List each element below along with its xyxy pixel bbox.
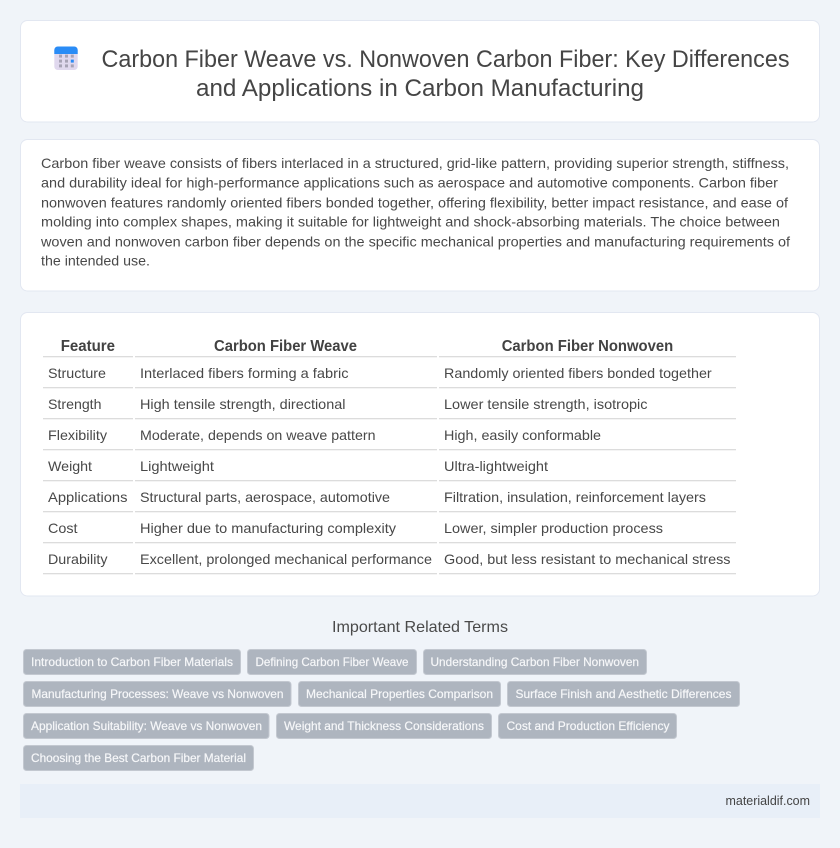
table row: structure: Interlaced fibers forming a fabric [140,365,348,381]
panel: header [20,20,820,122]
table row: strength: Strength [48,396,102,412]
text block: intro paragraph [40,155,790,268]
heading: related terms: Important Related Terms [332,619,508,636]
table row: weight: Weight [48,458,92,474]
table row: strength [43,396,736,419]
table header: Carbon Fiber Weave [214,338,357,355]
table row: flexibility: Moderate, depends on weave pattern [140,427,376,443]
table row: structure [43,365,736,388]
tag list: related terms [24,650,740,770]
title: and Applications in Carbon Manufacturing [196,75,644,102]
tag: Defining Carbon Fiber Weave [256,655,409,669]
tag: Weight and Thickness Considerations [284,719,484,733]
table row: flexibility [43,427,736,450]
table row: durability [43,551,736,574]
table row: weight: Ultra-lightweight [444,458,548,474]
icon: calendar grid [54,46,78,70]
table row: applications [43,489,736,512]
table row: applications: Structural parts, aerospace, automotive [140,489,390,505]
tag [298,682,500,706]
table header: Carbon Fiber Nonwoven [502,338,673,355]
text block: intro paragraph: molding into complex shapes, making it suitable for lightweight and shock-absorbing materials. The choice between [41,214,780,230]
text block: intro paragraph: the intended use. [41,252,150,268]
tag: Cost and Production Efficiency [506,719,670,733]
table row: cost: Lower, simpler production process [444,520,663,536]
tag: Introduction to Carbon Fiber Materials [31,655,233,669]
table row: durability: Good, but less resistant to mechanical stress [444,551,730,567]
footer: materialdif.com [726,794,810,808]
footer [20,784,820,818]
text block: intro paragraph: Carbon fiber weave consists of fibers interlaced in a structured, grid-like pattern, providing superior strength, stiffness, [41,155,789,171]
table row: structure: Structure [48,365,106,381]
tag [24,650,240,674]
tag: Surface Finish and Aesthetic Differences [516,687,732,701]
table header: Feature [61,338,115,355]
table row: cost: Cost [48,520,78,536]
tag: Manufacturing Processes: Weave vs Nonwoven [32,687,284,701]
table header [43,338,736,357]
title: Carbon Fiber Weave vs. Nonwoven Carbon Fiber: Key Differences [102,46,790,73]
table row: strength: Lower tensile strength, isotropic [444,396,648,412]
tag [276,714,492,738]
table row: durability: Durability [48,551,108,567]
table row: cost [43,520,736,543]
table row: flexibility: High, easily conformable [444,427,601,443]
table row: durability: Excellent, prolonged mechanical performance [140,551,432,567]
tag [24,682,291,706]
tag: Choosing the Best Carbon Fiber Material [31,751,246,765]
table row: applications: Filtration, insulation, reinforcement layers [444,489,706,505]
table row: strength: High tensile strength, directional [140,396,346,412]
tag [424,650,646,674]
panel: comparison table [20,312,820,596]
table row: structure: Randomly oriented fibers bonded together [444,365,712,381]
title [102,46,790,102]
tag: Application Suitability: Weave vs Nonwoven [31,719,262,733]
table row: applications: Applications [48,489,128,505]
table row: flexibility: Flexibility [48,427,107,443]
tag: Understanding Carbon Fiber Nonwoven [430,655,639,669]
table row: weight: Lightweight [140,458,214,474]
tag [24,746,254,770]
tag [508,682,740,706]
text block: intro paragraph: woven and nonwoven carbon fiber depends on the specific mechanical properties and manufacturing requirements of [40,234,790,250]
text block: intro paragraph: nonwoven features randomly oriented fibers bonded together, offering flexibility, better impact resistance, and ease of [41,194,788,210]
tag: Mechanical Properties Comparison [306,687,493,701]
tag [24,714,269,738]
text block: intro paragraph: and durability ideal for high-performance applications such as aerospace and automotive components. Carbon fiber [41,174,778,190]
panel: intro text [20,140,820,291]
table row: weight [43,458,736,481]
tag [498,714,676,738]
tag [248,650,416,674]
table row: cost: Higher due to manufacturing complexity [140,520,396,536]
